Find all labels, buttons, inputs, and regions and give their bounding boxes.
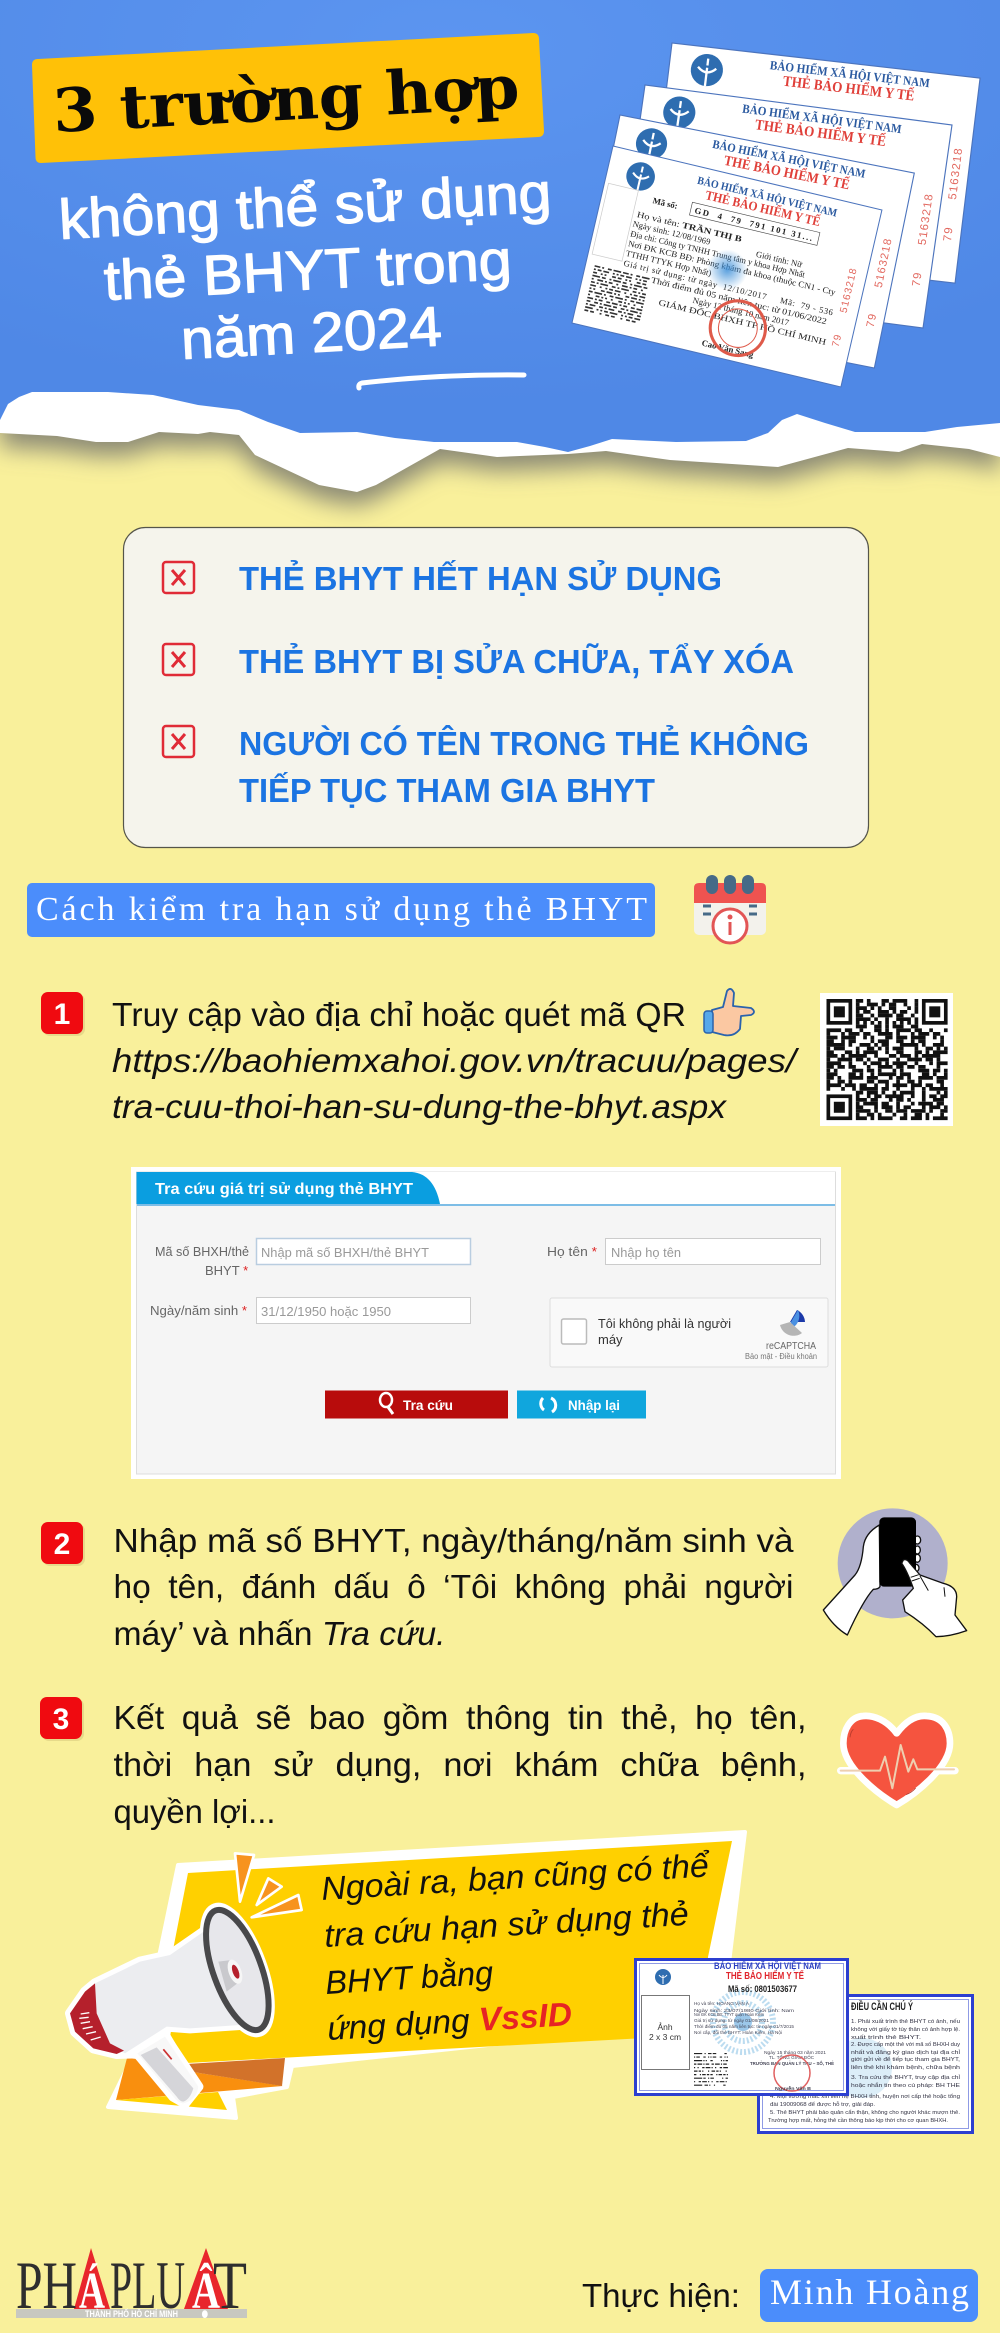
step 3 text: thời hạn sử dụng, nơi khám chữa bệnh, <box>114 1746 806 1783</box>
step 3 text: quyền lợi... <box>114 1793 276 1830</box>
case 3 text: NGƯỜI CÓ TÊN TRONG THẺ KHÔNG <box>239 724 809 762</box>
step 2 text: Nhập mã số BHYT, ngày/tháng/năm sinh và <box>114 1522 794 1559</box>
card: front: Họ và tên: TRẦN THỊ B <box>636 209 743 244</box>
title label: 3 trường hợp <box>32 33 544 163</box>
step 2 text: họ tên, đánh dấu ô ‘Tôi không phải người <box>114 1568 794 1605</box>
card: third <box>616 85 952 328</box>
footer logo: Pháp Luật: PH <box>16 2247 77 2323</box>
form fields: 31/12/1950 hoặc 1950 <box>261 1304 391 1319</box>
small VssID card: back: 1. Phải xuất trình thẻ BHYT có ảnh, nếu <box>851 2019 960 2025</box>
subtitle underline <box>359 375 524 388</box>
step 1 badge <box>41 992 85 1036</box>
card: front: 5163218 <box>839 267 860 314</box>
card: front: GD 4 79 791 101 31... <box>694 205 813 243</box>
footer logo: Pháp Luật: T <box>213 2247 247 2323</box>
form fields: Nhập họ tên <box>611 1245 681 1260</box>
recaptcha box <box>550 1298 828 1367</box>
step 2 badge: 2 <box>54 1528 70 1561</box>
case 3 text: TIẾP TỤC THAM GIA BHYT <box>239 772 655 809</box>
icon: calendar info <box>694 875 766 943</box>
card: second: 79 <box>865 312 879 328</box>
card: front: THẺ BẢO HIỂM Y TẾ <box>704 187 822 229</box>
step 2 text <box>114 1522 794 1652</box>
card: third: BẢO HIỂM XÃ HỘI VIỆT NAM <box>741 101 903 136</box>
icon: x mark 2 <box>163 644 194 675</box>
card: back: THẺ BẢO HIỂM Y TẾ <box>782 73 915 105</box>
card: front: BẢO HIỂM XÃ HỘI VIỆT NAM <box>696 174 839 220</box>
small VssID card: front: Ngày sinh: 23/07/1980 Giới tính: Nam <box>694 2008 794 2013</box>
small VssID card: back: giới gửi về để tiếp tục tham gia BHYT, <box>851 2056 961 2063</box>
card qr <box>694 2054 728 2085</box>
step 1 text <box>112 996 799 1125</box>
small VssID card: back <box>758 1996 972 2132</box>
form fields: BHYT * <box>205 1263 248 1278</box>
card: back: 5163218 <box>947 147 965 200</box>
small VssID card: back: xuất trình thẻ BHYT. <box>851 2035 922 2041</box>
card: third: 79 <box>911 271 925 287</box>
rays <box>235 1853 302 1917</box>
card: front: Ngày 12 tháng 10 năm 2017 <box>692 295 791 328</box>
step 2 text: máy’ và nhấn Tra cứu. <box>114 1615 446 1652</box>
footer logo: Pháp Luật: THÀNH PHỐ HỒ CHÍ MINH <box>85 2308 178 2319</box>
card: back: 79 <box>942 226 956 242</box>
recaptcha box: Tôi không phải là người <box>598 1316 731 1331</box>
step 1 text: tra-cuu-thoi-han-su-dung-the-bhyt.aspx <box>112 1088 728 1125</box>
small VssID card: back: ĐIỀU CẦN CHÚ Ý <box>851 2000 913 2013</box>
small VssID card: back: 5. Thẻ BHYT phải bảo quản cẩn thận, không cho người khác mượn thẻ. <box>770 2109 960 2116</box>
card: front: Giới tính: Nữ <box>755 249 803 270</box>
recaptcha box: reCAPTCHA <box>766 1340 816 1352</box>
card: front: Cao Văn Sang <box>701 338 755 360</box>
small VssID card: front: Mã số: 0801503677 <box>728 1984 797 1995</box>
screenshot: lookup form <box>131 1167 841 1479</box>
card: front: Ngày sinh: 12/08/1969 <box>632 219 711 247</box>
icon: pointing hand <box>704 989 754 1035</box>
form fields: Họ tên * <box>547 1244 597 1259</box>
small VssID card: back: đài 19009068 để được hỗ trợ, giải đáp. <box>770 2101 875 2108</box>
small VssID card: back: 3. Tra cứu thẻ BHYT, truy cập địa chỉ <box>851 2074 961 2081</box>
small VssID card: front: Giá trị sử dụng: từ ngày 01/08/2021 <box>694 2017 769 2023</box>
credit: Thực hiện: <box>582 2277 740 2314</box>
card: third: 5163218 <box>917 193 936 246</box>
step 2 badge <box>41 1522 85 1566</box>
recaptcha box: máy <box>598 1332 623 1347</box>
footer logo: Pháp Luật: Ậ <box>192 2262 220 2320</box>
case 2 text: THẺ BHYT BỊ SỬA CHỮA, TẨY XÓA <box>239 643 794 680</box>
small VssID card: front: TRƯỞNG BAN QUẢN LÝ THU – SỔ, THẺ <box>750 2060 834 2066</box>
small VssID card: back: liên thẻ khi khám bệnh, chữa bệnh <box>851 2065 960 2071</box>
small VssID card: front: BẢO HIỂM XÃ HỘI VIỆT NAM <box>714 1960 821 1971</box>
icon: x mark 3 <box>163 726 194 757</box>
subtitle: không thể sử dụng <box>57 161 553 251</box>
heading: how to check <box>27 883 655 937</box>
small VssID card: front: Ngày 15 tháng 03 năm 2021 <box>764 2050 826 2055</box>
small VssID card: back: không với giấy tờ tùy thân có ảnh hợp lệ. <box>851 2027 960 2033</box>
subtitle: thẻ BHYT trong <box>102 228 513 312</box>
credit: Minh Hoàng <box>770 2272 969 2312</box>
callout text: tra cứu hạn sử dụng thẻ <box>323 1895 690 1954</box>
card: front: Địa chỉ: Công ty TNHH Trung tâm y khoa Hợp Nhất <box>629 228 807 280</box>
step 1 badge: 1 <box>54 998 70 1031</box>
form fields: Ngày/năm sinh * <box>150 1303 247 1318</box>
step 1 text: https://baohiemxahoi.gov.vn/tracuu/pages/ <box>112 1042 799 1079</box>
reset button: Nhập lại <box>568 1397 620 1413</box>
callout text: Ngoài ra, bạn cũng có thể <box>320 1846 711 1907</box>
step 3 text <box>114 1699 806 1830</box>
torn paper header background <box>0 0 1000 506</box>
step 3 badge <box>40 1697 84 1741</box>
small VssID card: front: TL. TỔNG GIÁM ĐỐC <box>769 2054 815 2060</box>
search button <box>325 1390 508 1418</box>
card: third: THẺ BẢO HIỂM Y TẾ <box>754 116 887 150</box>
card: second: BẢO HIỂM XÃ HỘI VIỆT NAM <box>711 136 867 181</box>
card: front: 79 <box>831 333 844 348</box>
card: front: GIÁM ĐỐC BHXH TP HỒ CHÍ MINH <box>658 297 827 347</box>
card: front: Giá trị sử dụng: từ ngày 12/10/2017 Mã: 79 - 536 <box>623 258 835 317</box>
panel: three cases <box>124 528 868 848</box>
credit <box>582 2269 978 2322</box>
small VssID card: front: Nguyễn Văn B <box>775 2085 812 2091</box>
form fields: Mã số BHXH/thẻ <box>155 1244 249 1259</box>
card: front: Thời điểm đủ 05 năm liên tục: từ 01/06/2022 <box>650 275 828 326</box>
callout text: ứng dụng VssID <box>326 1995 573 2047</box>
small VssID card: front: THẺ BẢO HIỂM Y TẾ <box>726 1969 804 1982</box>
title label: 3 trường hợp: 3 trường hợp <box>51 53 521 147</box>
small VssID card: back: 4. Mọi vướng mắc xin liên hệ BHXH tỉnh, huyện nơi cấp thẻ hoặc tổng <box>770 2093 960 2100</box>
card: front: Mã số: <box>652 195 679 211</box>
card: back <box>647 43 980 283</box>
step 3 text: Kết quả sẽ bao gồm thông tin thẻ, họ tên, <box>114 1699 806 1736</box>
card: second: THẺ BẢO HIỂM Y TẾ <box>722 151 851 193</box>
icon: heart with pulse <box>841 1716 955 1805</box>
step 3 badge: 3 <box>53 1703 69 1736</box>
callout text <box>320 1846 711 2047</box>
card: second <box>580 115 914 368</box>
card qr <box>584 266 650 323</box>
icon: x mark 1 <box>163 562 194 593</box>
icon: hands holding phone <box>823 1508 967 1637</box>
case 1 text: THẺ BHYT HẾT HẠN SỬ DỤNG <box>239 560 722 597</box>
small VssID card: back: nhất và đăng ký giao dịch tại địa chỉ <box>851 2049 961 2056</box>
card: second: 5163218 <box>873 237 895 289</box>
callout: VssID banner <box>70 1832 745 2118</box>
screenshot: lookup form: Tra cứu giá trị sử dụng thẻ BHYT <box>155 1181 414 1198</box>
card: front: Nơi ĐK KCB BĐ: Phòng khám đa khoa (thuộc CN1 - Cty <box>627 238 837 297</box>
small VssID card: back: Trường hợp mất, hỏng thẻ cần thông báo kịp thời cho cơ quan BHXH. <box>768 2117 948 2124</box>
footer logo: Pháp Luật: Á <box>79 2262 105 2320</box>
footer logo: Pháp Luật <box>16 2247 247 2323</box>
small VssID card: front: Ảnh <box>657 2021 673 2032</box>
card: front <box>572 146 882 387</box>
card: back: BẢO HIỂM XÃ HỘI VIỆT NAM <box>769 57 931 90</box>
search button: Tra cứu <box>403 1397 453 1413</box>
small VssID card: front: Thời điểm đủ 05 năm liên tục: từ ngày 01/7/2015 <box>694 2023 794 2029</box>
small VssID card: front: Họ và tên: HOÀNG VĂN A <box>694 2000 750 2006</box>
reset button <box>517 1390 646 1418</box>
case 3 text <box>239 724 809 809</box>
heading: how to check: Cách kiểm tra hạn sử dụng thẻ BHYT <box>36 891 647 928</box>
callout text: BHYT bằng <box>324 1954 495 2001</box>
QR code <box>820 993 953 1126</box>
subtitle <box>57 161 553 371</box>
icon: megaphone <box>70 1853 302 2103</box>
small VssID card: front: 2 x 3 cm <box>649 2032 681 2042</box>
form tab <box>136 1172 440 1204</box>
small VssID card: back: hoặc nhắn tin theo cú pháp: BH THE <box>851 2082 960 2089</box>
small VssID card: front <box>636 1960 848 2094</box>
step 1 text: Truy cập vào địa chỉ hoặc quét mã QR <box>112 996 686 1033</box>
subtitle: năm 2024 <box>179 294 443 371</box>
stacked insurance cards <box>572 43 980 387</box>
small VssID card: back: 2. Được cấp một thẻ với mã số BHXH duy <box>851 2042 960 2048</box>
card: front: TTHH TTYK Hợp Nhất) <box>625 248 713 278</box>
recaptcha box: Bảo mật - Điều khoản <box>745 1352 817 1361</box>
footer logo: Pháp Luật: PLU <box>110 2247 185 2323</box>
banner background <box>108 1832 745 2118</box>
form fields: Nhập mã số BHXH/thẻ BHYT <box>261 1245 429 1260</box>
form fields <box>150 1238 820 1324</box>
small VssID card: front: Nơi cấp, đổi thẻ BHYT: Hoàn Kiếm, Hà Nội <box>694 2029 782 2035</box>
small VssID card: front: Nơi ĐK KCB BĐ: TTYT quận Hoàn Kiếm <box>694 2012 764 2017</box>
